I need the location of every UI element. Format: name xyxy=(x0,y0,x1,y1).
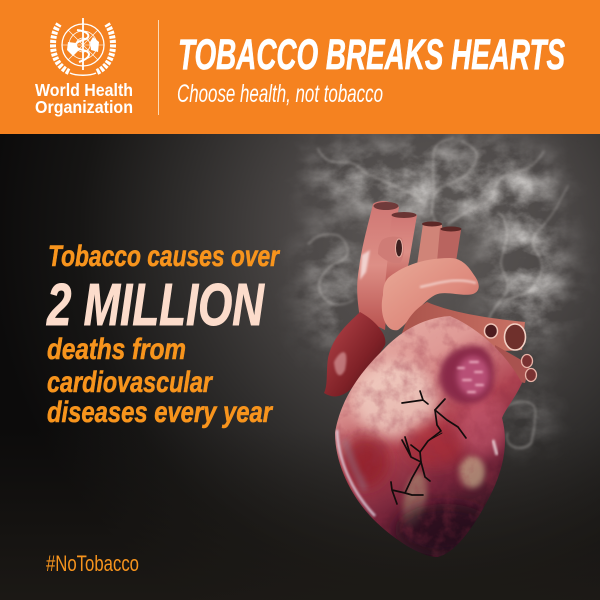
side vessel xyxy=(378,237,404,263)
right arteries xyxy=(395,302,525,352)
header band xyxy=(0,0,600,134)
WHO wordmark: World Health xyxy=(35,80,133,100)
statistic text: diseases every year xyxy=(47,396,274,429)
statistic text xyxy=(46,240,281,429)
left atrium xyxy=(324,312,385,396)
purple muscle patch xyxy=(440,346,494,404)
subtitle: Choose health, not tobacco xyxy=(177,80,383,108)
ventricle body xyxy=(335,316,522,557)
vessel: second xyxy=(385,215,417,290)
description lines: deaths from xyxy=(47,333,186,366)
divider xyxy=(158,20,159,115)
statistic text: cardiovascular xyxy=(47,366,214,399)
key number: 2 MILLION xyxy=(46,272,265,338)
WHO wordmark: Organization xyxy=(35,97,133,117)
smoke xyxy=(289,134,582,454)
WHO wordmark xyxy=(35,80,133,117)
shading and highlights inside the ventricle xyxy=(330,316,525,561)
vessel: far left xyxy=(357,201,399,330)
aortic arch mass xyxy=(382,258,479,330)
hashtag: #NoTobacco xyxy=(46,551,139,576)
cracks xyxy=(391,391,466,504)
dark background xyxy=(0,134,600,600)
vessel: third and fourth xyxy=(417,224,446,265)
lead line: Tobacco causes over xyxy=(48,240,281,273)
heart illustration xyxy=(324,201,536,561)
WHO emblem xyxy=(53,18,113,75)
